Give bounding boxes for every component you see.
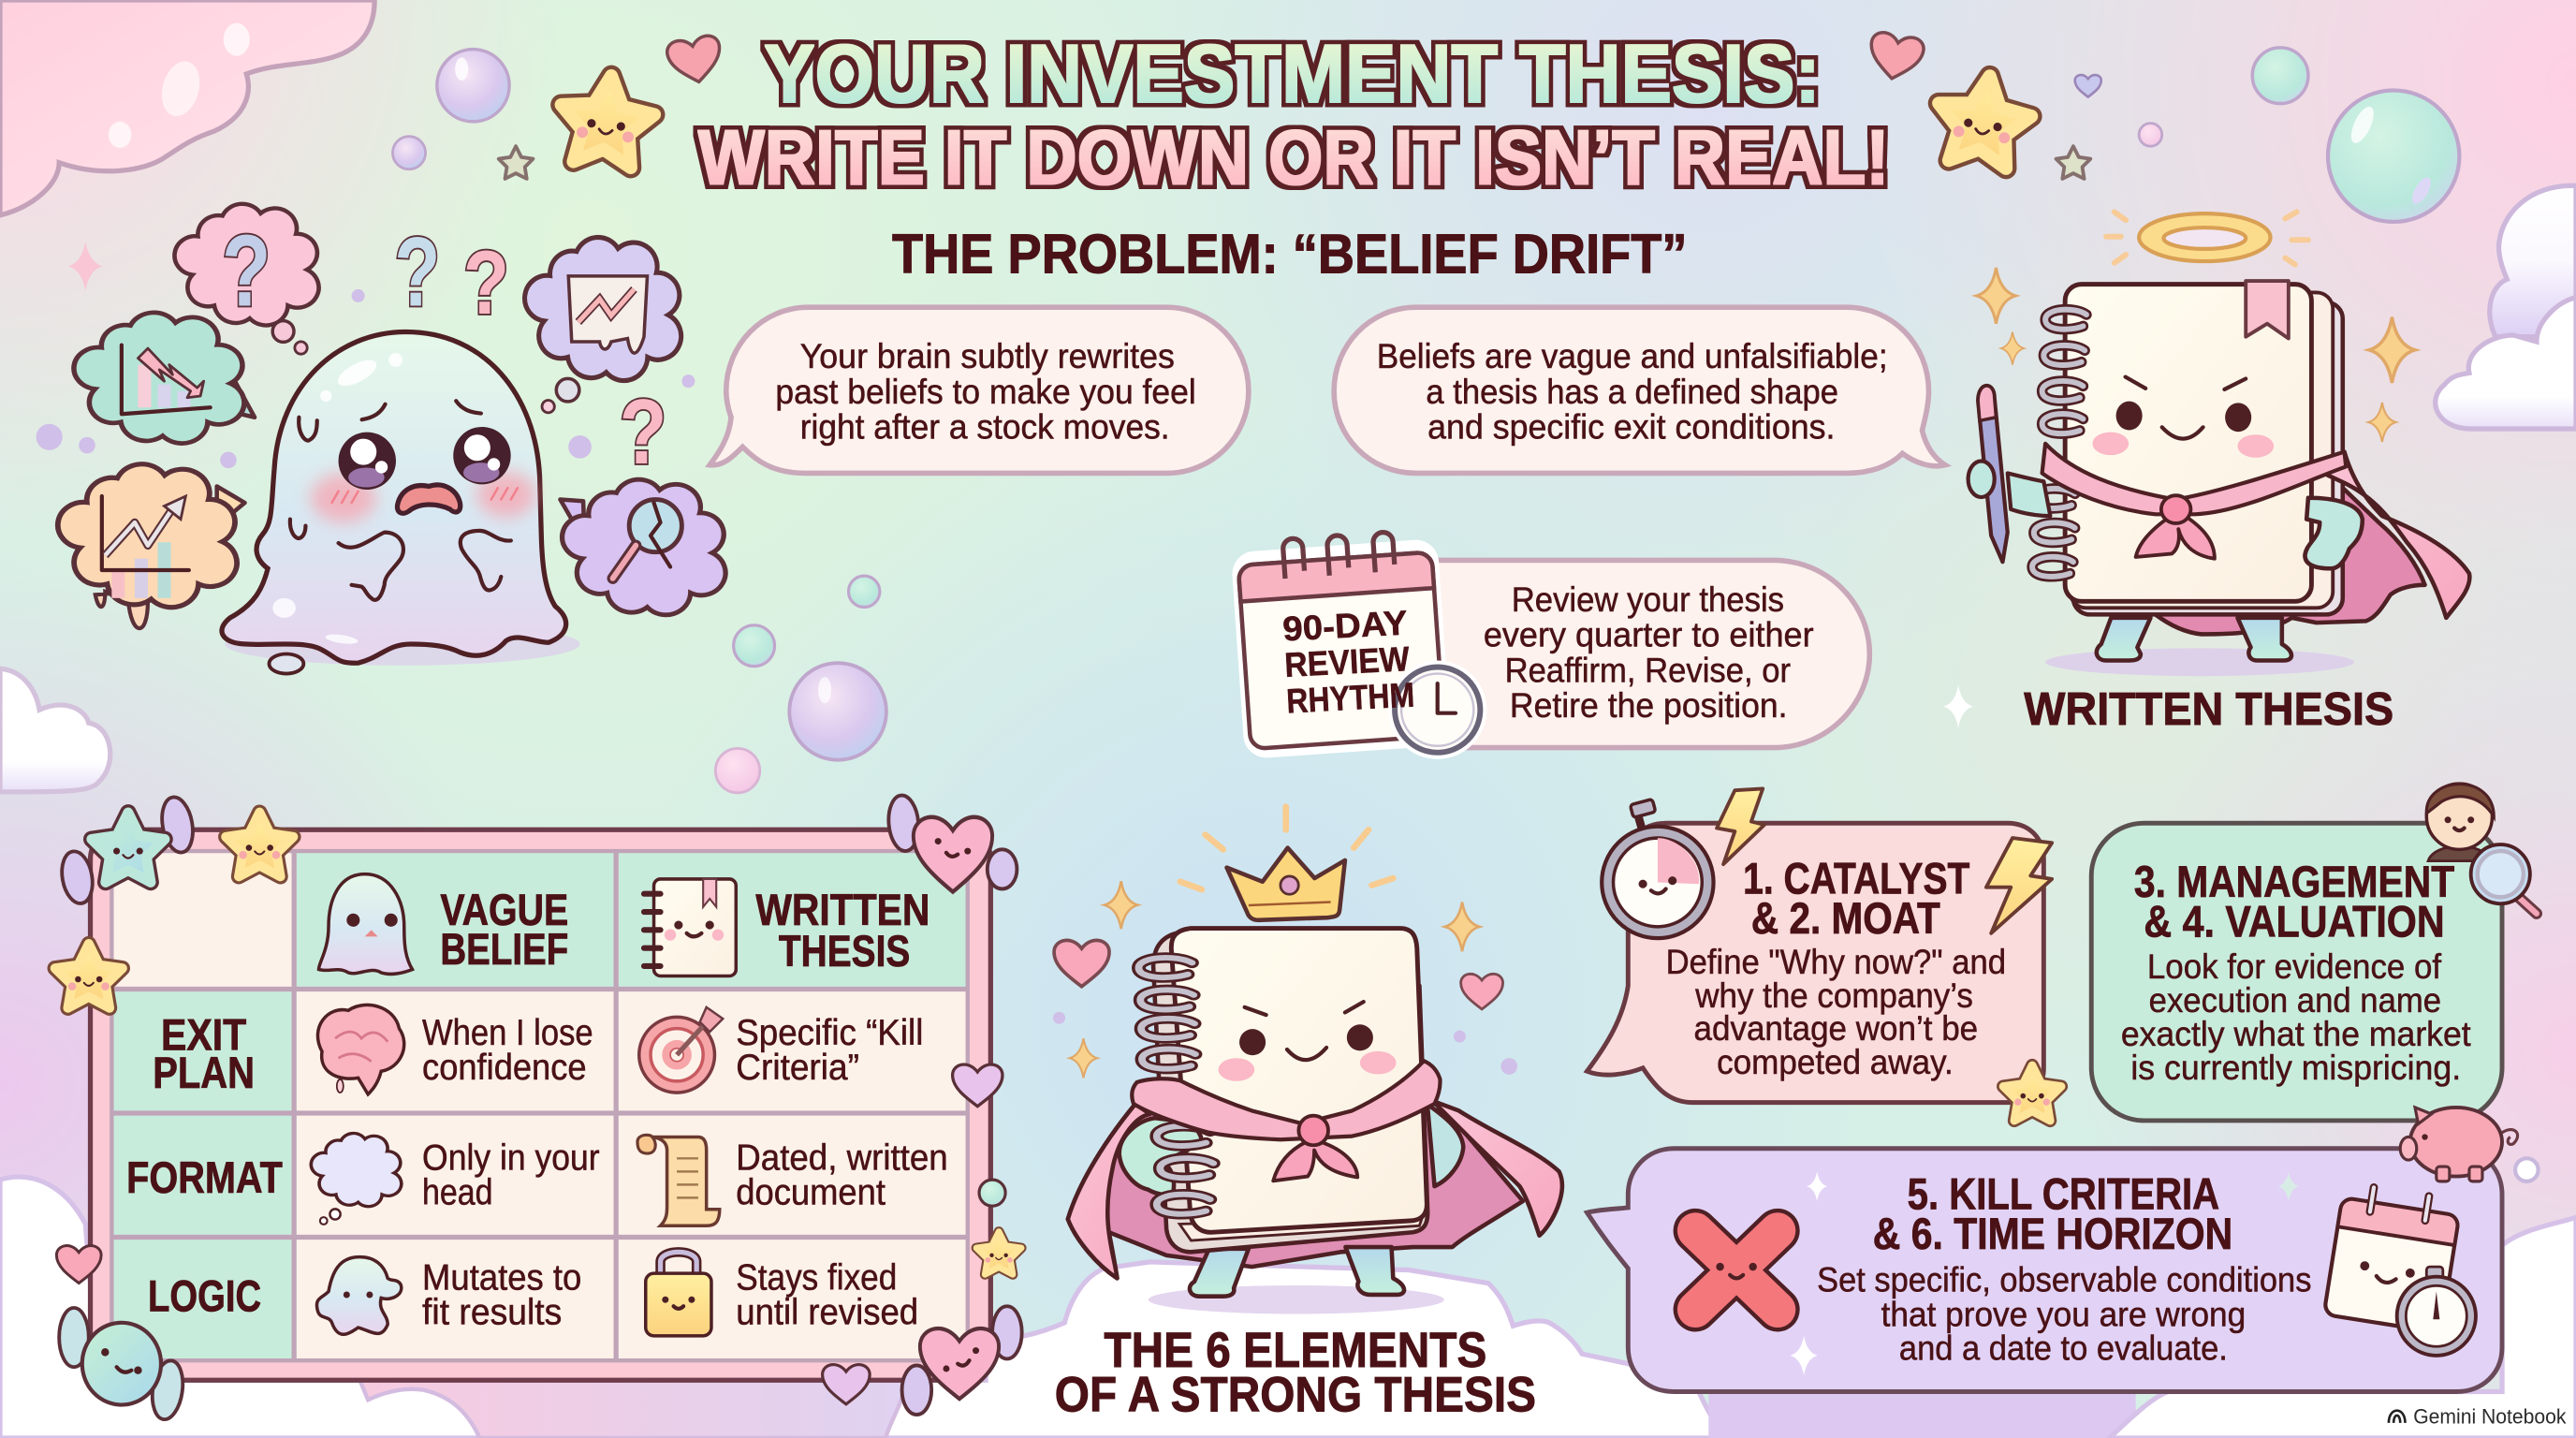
thought bubble: rising melting chart: [58, 464, 245, 628]
panel: kill criteria and time horizon: and a date to evaluate.: [1899, 1328, 2228, 1367]
icon: big lightning: [1986, 838, 2052, 933]
icon: calendar: [2324, 1182, 2462, 1333]
thought bubble: melting screen chart: [525, 238, 681, 381]
row: logic: Mutates to: [422, 1258, 581, 1299]
callout: 90-day review: [1237, 529, 1869, 759]
icon: small notebook: [644, 879, 736, 976]
heading: the 6 elements: [1055, 1323, 1536, 1423]
label: written thesis: WRITTEN THESIS: [2024, 684, 2393, 735]
panel: kill criteria and time horizon: Set specific, observable conditions: [1817, 1260, 2311, 1299]
legs: [2097, 618, 2291, 661]
speech bubble: rewrites: [710, 307, 1249, 473]
thought bubble: cracked magnifier: [560, 479, 725, 615]
ghost body: [222, 332, 566, 663]
notebook cover: [2065, 285, 2311, 601]
panel: catalyst and moat: 1. CATALYST: [1743, 855, 1969, 904]
ghost shadow: [225, 623, 580, 666]
right arm: [2305, 498, 2363, 568]
ghost face: [272, 353, 535, 645]
icon: stopwatch: [2397, 1267, 2476, 1356]
icon: sparkle: [68, 242, 103, 291]
panel: management and valuation: 3. MANAGEMENT: [2134, 858, 2454, 907]
panel: catalyst and moat: why the company’s: [1694, 976, 1973, 1015]
icon: target: [639, 1007, 723, 1093]
row labels: FORMAT: [126, 1153, 283, 1203]
row labels: EXIT: [161, 1010, 246, 1060]
legs: [1190, 1247, 1404, 1297]
scarf: [1132, 1061, 1440, 1139]
speech bubble: unfalsifiable: and specific exit conditions.: [1427, 408, 1835, 447]
panel: kill criteria and time horizon: [1587, 1149, 2502, 1392]
cape back: [1068, 1104, 1523, 1278]
review bubble: Retire the position.: [1510, 686, 1788, 725]
header: vague belief: VAGUE: [440, 886, 568, 935]
header: written thesis: WRITTEN: [755, 886, 929, 935]
question marks: [394, 217, 667, 483]
scarf knot: [1273, 1116, 1357, 1181]
panel: management and valuation: & 4. VALUATION: [2144, 897, 2445, 946]
cloud: funnel under table: [359, 1380, 907, 1438]
cloud: bottom white sweep: [0, 1177, 1725, 1438]
bookmark: [2246, 281, 2289, 339]
icon: padlock: [646, 1252, 711, 1336]
panel: management and valuation: exactly what the market: [2121, 1015, 2471, 1053]
question marks: ?: [463, 233, 509, 333]
panel: kill criteria and time horizon: 5. KILL CRITERIA: [1908, 1170, 2219, 1220]
scarf: [2042, 444, 2346, 514]
header: written thesis: [644, 879, 929, 976]
panel: management and valuation: [2091, 784, 2537, 1121]
calendar label: RHYTHM: [1285, 675, 1415, 721]
calendar label: 90-DAY: [1281, 604, 1409, 648]
question marks: ?: [620, 380, 667, 483]
arms: [1120, 1104, 1463, 1195]
panel: catalyst and moat: Define "Why now?" and: [1666, 943, 2006, 981]
cape front: [2317, 452, 2469, 618]
icon: small ghost: [318, 874, 413, 974]
icon: stopwatch: [1602, 800, 1714, 938]
icon: white sparkle: [1943, 685, 1973, 727]
table decorations: [55, 794, 1022, 1421]
halo: [2106, 212, 2308, 265]
row: format: [311, 1134, 948, 1225]
review bubble: Reaffirm, Revise, or: [1505, 651, 1791, 689]
panel: management and valuation: is currently mispricing.: [2130, 1049, 2461, 1087]
panel: management and valuation: execution and name: [2149, 981, 2441, 1020]
header: vague belief: [318, 874, 568, 975]
title: WRITE IT DOWN OR IT ISN’T REAL!: [698, 115, 1889, 201]
panel: kill criteria and time horizon: & 6. TIME HORIZON: [1873, 1210, 2232, 1259]
title: YOUR INVESTMENT THESIS:: [764, 28, 1821, 120]
notebook pages: [2073, 302, 2343, 614]
ghost puddle drops: [269, 654, 303, 674]
panel: kill criteria and time horizon: that prove you are wrong: [1881, 1295, 2246, 1333]
speech bubble: rewrites: right after a stock moves.: [800, 408, 1170, 447]
review bubble: Review your thesis: [1512, 580, 1784, 619]
icon: red x: [1695, 1231, 1778, 1310]
header: vague belief: BELIEF: [440, 925, 568, 975]
cloud: bottom right band: [1708, 1388, 2136, 1438]
calendar label: REVIEW: [1283, 639, 1411, 684]
review bubble: every quarter to either: [1484, 616, 1814, 654]
row labels: [126, 1010, 283, 1322]
scarf knot: [2136, 495, 2215, 559]
panel: catalyst and moat: competed away.: [1717, 1043, 1954, 1081]
cloud: right lower white: [2436, 298, 2576, 429]
thought bubble: question: ?: [222, 213, 271, 328]
question marks: ?: [394, 217, 440, 327]
dots and small bubbles: [37, 289, 695, 468]
icon: thought cloud: [311, 1134, 402, 1225]
speech bubble: unfalsifiable: [1334, 307, 1945, 473]
lower rings: [1157, 1126, 1213, 1214]
table: vague belief vs written thesis: [55, 794, 1022, 1421]
sparkles and hearts: [1053, 881, 1517, 1078]
cape front left: [1068, 1104, 1150, 1278]
watermark: gemini notebook: Gemini Notebook: [2413, 1405, 2567, 1429]
heading: the 6 elements: OF A STRONG THESIS: [1055, 1368, 1536, 1423]
spiral rings: [2032, 310, 2086, 577]
notebook cover: [1171, 929, 1427, 1232]
heading: the 6 elements: THE 6 ELEMENTS: [1104, 1323, 1486, 1378]
spiral rings: [1138, 958, 1195, 1069]
icon: small lightning: [1717, 788, 1764, 864]
title: [698, 28, 1889, 201]
review bubble: [1429, 560, 1869, 748]
sparkles: [1977, 268, 2415, 442]
sparkles: [1790, 1171, 2299, 1375]
icon: melting brain: [317, 1005, 404, 1094]
row labels: LOGIC: [148, 1272, 261, 1322]
icon: scroll: [637, 1135, 720, 1225]
thought bubble: question: [174, 204, 319, 328]
row: logic: fit results: [422, 1293, 562, 1333]
row: exit plan: Specific “Kill: [736, 1013, 923, 1053]
decorations: floating bubbles: [715, 576, 886, 793]
speech bubble: unfalsifiable: Beliefs are vague and unfalsifiable;: [1377, 337, 1888, 375]
thought bubble: falling chart: [74, 313, 255, 444]
row: exit plan: confidence: [422, 1048, 587, 1088]
decorations: top stars, hearts and bubbles: [392, 31, 2459, 222]
pen and left hand: [1969, 386, 2050, 562]
cape back: [2156, 485, 2425, 634]
icon: clock: [1388, 661, 1486, 759]
cloud: bottom right white: [2110, 1217, 2576, 1438]
row: logic: [316, 1252, 918, 1336]
crown: [1180, 807, 1393, 920]
row: format: Dated, written: [736, 1138, 948, 1179]
speech bubble: rewrites: Your brain subtly rewrites: [800, 337, 1175, 375]
character: written thesis notebook: [1969, 212, 2469, 676]
icon: person: [2426, 784, 2494, 861]
calendar label: [1281, 603, 1415, 721]
row: exit plan: [317, 1005, 923, 1094]
heading: the problem: THE PROBLEM: “BELIEF DRIFT”: [892, 222, 1687, 285]
face: [2092, 377, 2274, 458]
icon: star: [2003, 1065, 2061, 1121]
row: exit plan: Criteria”: [736, 1048, 859, 1088]
row: logic: Stays fixed: [736, 1258, 897, 1299]
illustration: confused ghost with thought bubbles: [37, 204, 725, 674]
cloud: top left pink: [0, 0, 374, 215]
panel: management and valuation: Look for evidence of: [2147, 947, 2442, 986]
cloud: left middle white: [0, 668, 110, 792]
row: logic: until revised: [736, 1293, 918, 1333]
speech bubble: rewrites: past beliefs to make you feel: [775, 373, 1196, 411]
icon: magnifier: [2471, 844, 2537, 914]
speech bubble: unfalsifiable: a thesis has a defined shape: [1426, 373, 1838, 411]
small bubble: [2515, 1158, 2539, 1181]
cape front right: [1432, 1101, 1562, 1236]
icon: calendar: [1237, 529, 1444, 753]
icon: mutating ghost: [316, 1257, 402, 1334]
panel: catalyst and moat: & 2. MOAT: [1751, 894, 1940, 944]
character: crowned notebook: [1053, 807, 1562, 1313]
face: [1219, 1002, 1396, 1081]
row: format: head: [422, 1172, 493, 1212]
header: written thesis: THESIS: [779, 927, 910, 976]
panel: catalyst and moat: [1587, 788, 2061, 1121]
row labels: PLAN: [153, 1049, 255, 1098]
row: exit plan: When I lose: [422, 1013, 593, 1053]
icon: piggy bank: [2400, 1108, 2518, 1181]
panel: catalyst and moat: advantage won’t be: [1694, 1009, 1978, 1048]
notebook pages: [1153, 933, 1427, 1252]
row: format: Only in your: [422, 1138, 600, 1179]
table frame: [91, 829, 990, 1380]
row: format: document: [736, 1172, 886, 1212]
cloud: right upper: [2490, 185, 2576, 337]
